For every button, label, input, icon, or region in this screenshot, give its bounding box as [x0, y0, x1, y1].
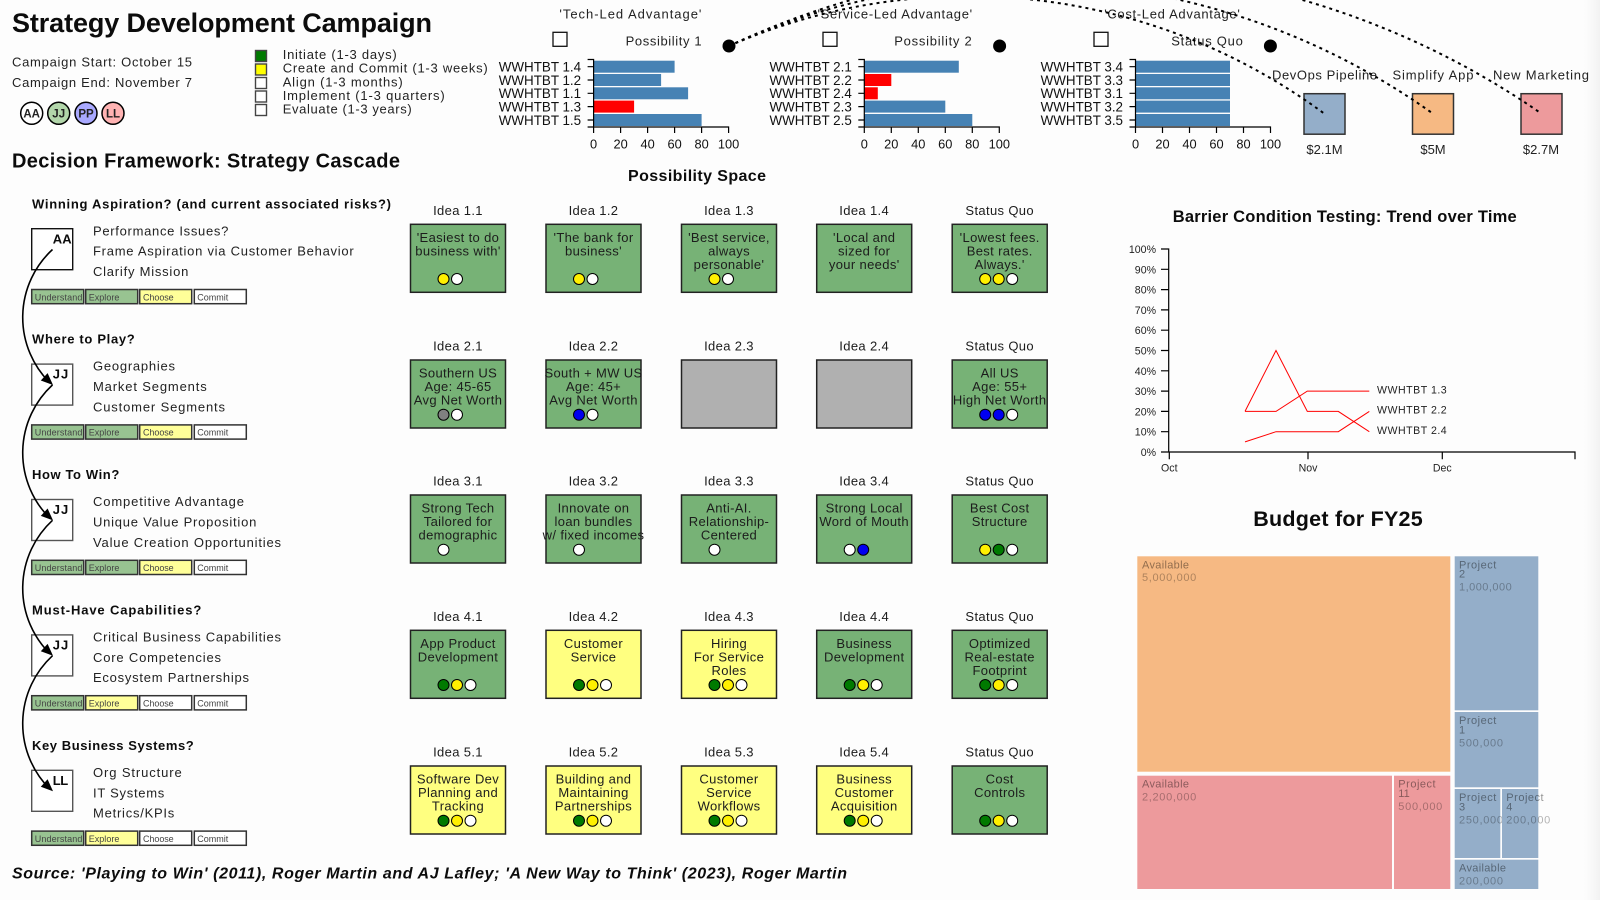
panel: must-have capabilities: Explore: [89, 698, 119, 708]
panel: winning aspiration: Performance Issues?: [93, 223, 228, 238]
treemap: budget for FY25: 1,000,000: [1459, 582, 1512, 594]
card: Idea 5.4: Acquisition: [831, 799, 898, 814]
treemap: budget for FY25: 2,200,000: [1142, 792, 1196, 804]
card: Idea 1.3: [682, 203, 776, 292]
card: Status Quo row 3: Status Quo: [965, 474, 1034, 489]
card: Idea 4.3: For Service: [694, 649, 764, 664]
card: Idea 3.4: Word of Mouth: [819, 514, 909, 529]
card: Idea 2.2: Idea 2.2: [569, 339, 618, 354]
bar chart: possibility 2: [769, 60, 1010, 152]
card: Idea 1.4: [817, 203, 912, 292]
panel: how to win: JJ: [53, 502, 68, 517]
bar chart: status quo: 100: [1260, 137, 1281, 152]
bar chart: possibility 2: WWHTBT 2.2: [769, 73, 852, 88]
card: Status Quo row 2: High Net Worth: [953, 393, 1046, 408]
team avatars: LL: [106, 108, 120, 120]
panel: must-have capabilities: JJ: [53, 638, 68, 653]
panel: winning aspiration: Choose: [143, 292, 174, 302]
card: Idea 3.1: Strong Tech: [422, 501, 494, 516]
line chart: barrier trend: 10%: [1135, 427, 1157, 439]
card: Idea 4.3: Roles: [712, 663, 747, 678]
bar chart: status quo: WWHTBT 3.1: [1041, 86, 1123, 101]
legend: phases: Initiate (1-3 days): [283, 47, 397, 62]
card: Idea 3.4: [817, 474, 912, 563]
status quo header: [1094, 6, 1277, 52]
card: Idea 5.2: Idea 5.2: [569, 745, 618, 760]
bar chart: possibility 2: WWHTBT 2.1: [769, 60, 852, 74]
card: Idea 2.4: Idea 2.4: [839, 339, 889, 354]
card: Status Quo row 2: Age: 55+: [972, 379, 1027, 394]
dashed links: possibility to projects: [729, 0, 1541, 113]
panel: where to play: Where to Play?: [32, 332, 135, 347]
bar chart: status quo: WWHTBT 3.2: [1041, 99, 1123, 114]
bar chart: status quo: WWHTBT 3.4: [1041, 60, 1124, 74]
legend: phases: Evaluate (1-3 years): [283, 102, 412, 116]
treemap: budget for FY25: 200,000: [1459, 875, 1503, 887]
legend: phases: Implement (1-3 quarters): [283, 88, 445, 103]
campaign dates: [12, 55, 192, 90]
card: Idea 4.2: [546, 609, 641, 698]
panel: where to play: Choose: [143, 428, 174, 438]
panel: how to win: Unique Value Proposition: [93, 514, 256, 530]
panel: key business systems: Explore: [89, 834, 119, 844]
bar chart: possibility 2: 100: [989, 137, 1010, 152]
card: Idea 5.3: Idea 5.3: [704, 745, 754, 760]
source note: Source: 'Playing to Win' (2011), Roger Martin and AJ Lafley; 'A New Way to Think' (2023), Roger Martin: [12, 865, 847, 882]
line chart: barrier trend: [1129, 244, 1575, 475]
line chart: barrier trend: 90%: [1135, 264, 1157, 276]
line chart: barrier trend: 80%: [1135, 285, 1157, 297]
bar chart: possibility 2: 20: [884, 137, 898, 152]
bar chart: possibility 2: WWHTBT 2.3: [769, 99, 852, 114]
panel: must-have capabilities: [32, 602, 282, 710]
card: Idea 2.2: Avg Net Worth: [549, 393, 638, 408]
project: New Marketing: [1493, 67, 1589, 157]
card: Status Quo row 2: Status Quo: [965, 339, 1034, 354]
card: Idea 1.1: Idea 1.1: [433, 203, 483, 218]
bar chart: possibility 2: WWHTBT 2.5: [769, 113, 852, 128]
card: Idea 3.2: Innovate on: [558, 501, 629, 516]
card: Idea 2.1: Southern US: [419, 366, 497, 381]
card: Idea 3.3: Idea 3.3: [704, 474, 754, 489]
card: Idea 4.4: [817, 609, 912, 698]
card: Idea 3.2: [542, 474, 644, 563]
card: Idea 4.1: Development: [418, 649, 498, 664]
panel: key business systems: Understand: [35, 834, 82, 844]
panel: key business systems: Metrics/KPIs: [93, 806, 175, 821]
card: Idea 5.1: Tracking: [432, 799, 484, 814]
card: Idea 1.3: always: [708, 244, 750, 259]
line chart: barrier trend: 30%: [1135, 386, 1157, 398]
card: Status Quo row 3: Structure: [972, 514, 1028, 529]
bar chart: possibility 1: 20: [613, 137, 628, 152]
card: Idea 5.2: Partnerships: [555, 799, 632, 814]
panel: winning aspiration: AA: [53, 231, 72, 246]
card: Idea 5.4: [817, 745, 912, 834]
possibility 2 header: [818, 6, 1006, 52]
card: Idea 4.4: Business: [836, 636, 892, 651]
bar chart: possibility 2: 40: [911, 137, 925, 152]
card: Status Quo row 5: [952, 745, 1047, 834]
treemap: budget for FY25: Project: [1459, 792, 1496, 804]
card: Idea 5.1: [410, 745, 506, 834]
card: Idea 1.2: [546, 203, 641, 292]
team avatars: [21, 102, 124, 124]
treemap: budget for FY25: 250,000: [1459, 815, 1503, 827]
card: Idea 3.2: loan bundles: [555, 514, 633, 529]
heading: barrier condition testing: Barrier Condition Testing: Trend over Time: [1173, 208, 1517, 226]
panel: key business systems: Commit: [197, 834, 229, 844]
card: Idea 2.1: Avg Net Worth: [414, 393, 502, 408]
line chart: barrier trend: 40%: [1135, 366, 1157, 378]
card: Idea 4.1: [410, 609, 506, 698]
status quo header: Status Quo: [1171, 34, 1243, 49]
card: Idea 3.1: demographic: [418, 528, 498, 543]
card: Idea 4.1: Idea 4.1: [433, 609, 483, 624]
line chart: barrier trend: 50%: [1135, 346, 1157, 358]
treemap: budget for FY25: Project: [1398, 779, 1436, 791]
card: Idea 5.3: Workflows: [698, 799, 761, 814]
line chart: barrier trend: Oct: [1161, 463, 1178, 475]
card: Idea 4.3: Idea 4.3: [704, 609, 754, 624]
card: Idea 1.1: 'Easiest to do: [417, 230, 499, 245]
card: Idea 2.1: Idea 2.1: [433, 339, 483, 354]
card: Idea 4.3: Hiring: [711, 636, 747, 651]
card: Idea 1.2: Idea 1.2: [569, 203, 618, 218]
bar chart: possibility 1: WWHTBT 1.2: [499, 73, 581, 88]
project: New Marketing: $2.7M: [1523, 142, 1559, 157]
bar chart: possibility 1: 0: [590, 137, 597, 152]
line chart: barrier trend: WWHTBT 2.2: [1377, 405, 1447, 417]
project: DevOps Pipeline: [1272, 67, 1377, 157]
panel: winning aspiration: Commit: [197, 292, 229, 302]
arrows: cascade links: [23, 250, 53, 791]
line chart: barrier trend: 100%: [1129, 244, 1157, 256]
card: Idea 4.4: Idea 4.4: [839, 609, 889, 624]
bar chart: possibility 1: WWHTBT 1.3: [499, 99, 581, 114]
card: Status Quo row 5: Cost: [986, 772, 1014, 787]
panel: key business systems: Org Structure: [93, 765, 182, 780]
bar chart: possibility 2: 80: [965, 137, 979, 152]
panel: how to win: How To Win?: [32, 467, 119, 482]
card: Idea 4.1: App Product: [420, 636, 496, 651]
panel: where to play: Explore: [89, 428, 119, 438]
panel: how to win: [32, 467, 282, 574]
title: Strategy Development Campaign: [12, 8, 432, 38]
card: Idea 1.4: 'Local and: [833, 230, 895, 245]
bar chart: possibility 1: [499, 60, 739, 152]
card: Idea 5.2: Building and: [556, 772, 631, 787]
bar chart: status quo: [1041, 60, 1281, 152]
treemap: budget for FY25: 1: [1459, 725, 1465, 737]
card: Idea 5.4: Business: [836, 772, 892, 787]
treemap: budget for FY25: [1137, 556, 1550, 889]
line chart: barrier trend: Nov: [1299, 463, 1318, 475]
legend: phases: Align (1-3 months): [283, 74, 403, 89]
treemap: budget for FY25: Project: [1459, 715, 1496, 727]
card: Idea 4.3: [682, 609, 776, 698]
card: Idea 5.2: [546, 745, 641, 834]
campaign dates: Campaign End: November 7: [12, 75, 192, 90]
bar chart: possibility 2: 60: [938, 137, 952, 152]
card: Status Quo row 4: Status Quo: [965, 609, 1034, 624]
panel: where to play: Geographies: [93, 359, 176, 374]
panel: must-have capabilities: Critical Business Capabilities: [93, 630, 282, 645]
project: Simplify App: [1392, 67, 1474, 157]
card: Status Quo row 2: All US: [981, 366, 1019, 381]
card: Status Quo row 5: Controls: [974, 785, 1025, 800]
card: Idea 3.3: [682, 474, 776, 563]
card: Idea 2.2: South + MW US: [544, 366, 643, 381]
card: Idea 3.2: Idea 3.2: [569, 474, 618, 489]
treemap: budget for FY25: 200,000: [1506, 815, 1550, 827]
card: Idea 1.4: sized for: [838, 244, 891, 259]
card: Idea 5.1: Idea 5.1: [433, 745, 483, 760]
card: Status Quo row 4: Footprint: [972, 663, 1027, 678]
line chart: barrier trend: Dec: [1433, 463, 1452, 475]
card: Idea 3.4: Strong Local: [826, 501, 903, 516]
status quo header: 'Cost-Led Advantage': [1104, 6, 1240, 21]
card: Idea 2.3: Idea 2.3: [704, 339, 754, 354]
card: Idea 2.1: Age: 45-65: [424, 379, 492, 394]
bar chart: possibility 1: 100: [718, 137, 739, 152]
legend: phases: Create and Commit (1-3 weeks): [283, 61, 488, 76]
possibility 1 header: 'Tech-Led Advantage': [559, 6, 701, 21]
panel: where to play: JJ: [53, 367, 68, 382]
card: Idea 3.2: w/ fixed incomes: [542, 528, 644, 543]
card: Idea 1.4: Idea 1.4: [839, 203, 889, 218]
card: Status Quo row 2: [952, 339, 1047, 428]
bar chart: status quo: 20: [1155, 137, 1170, 152]
legend: phases: [256, 47, 488, 116]
panel: must-have capabilities: Understand: [35, 698, 82, 708]
panel: must-have capabilities: Ecosystem Partnerships: [93, 670, 250, 685]
card: Status Quo row 3: [952, 474, 1047, 563]
treemap: budget for FY25: 500,000: [1398, 801, 1442, 813]
bar chart: status quo: WWHTBT 3.3: [1041, 73, 1123, 88]
panel: winning aspiration: Winning Aspiration? (and current associated risks?): [32, 196, 391, 211]
card: Idea 5.1: Software Dev: [417, 772, 499, 787]
treemap: budget for FY25: Available: [1142, 779, 1189, 791]
bar chart: possibility 1: WWHTBT 1.5: [499, 113, 581, 128]
card: Status Quo row 4: [952, 609, 1047, 698]
card: Idea 3.1: Tailored for: [424, 514, 493, 529]
card: Idea 3.3: Centered: [701, 528, 757, 543]
bar chart: possibility 1: 40: [640, 137, 655, 152]
panel: winning aspiration: Clarify Mission: [93, 264, 188, 279]
card: Status Quo row 4: Optimized: [969, 636, 1031, 651]
panel: where to play: [32, 332, 246, 439]
card: Idea 2.3: [682, 339, 776, 428]
treemap: budget for FY25: 500,000: [1459, 737, 1503, 749]
card: Idea 4.4: Development: [824, 649, 904, 664]
panel: key business systems: IT Systems: [93, 785, 165, 800]
card: Idea 2.2: Age: 45+: [566, 379, 621, 394]
line chart: barrier trend: 60%: [1135, 325, 1157, 337]
card: Idea 4.2: Customer: [564, 636, 623, 651]
campaign dates: Campaign Start: October 15: [12, 55, 192, 70]
panel: key business systems: [32, 738, 246, 845]
card: Status Quo row 1: Always.': [975, 257, 1025, 272]
card: Idea 5.4: Customer: [835, 785, 894, 800]
panel: where to play: Understand: [35, 428, 82, 438]
panel: key business systems: LL: [53, 773, 68, 788]
bar chart: status quo: 0: [1132, 137, 1139, 152]
card: Status Quo row 3: Best Cost: [970, 501, 1029, 516]
card: Idea 3.1: Idea 3.1: [433, 474, 483, 489]
card: Idea 5.4: Idea 5.4: [839, 745, 889, 760]
panel: how to win: Commit: [197, 563, 229, 573]
bar chart: status quo: 60: [1209, 137, 1224, 152]
card: Idea 5.2: Maintaining: [558, 785, 629, 800]
card: Idea 1.3: 'Best service,: [688, 230, 770, 245]
card: Status Quo row 1: Best rates.: [967, 244, 1033, 259]
bar chart: possibility 1: WWHTBT 1.1: [499, 86, 581, 101]
treemap: budget for FY25: Project: [1506, 792, 1544, 804]
card: Idea 2.2: [544, 339, 643, 428]
heading: budget: Budget for FY25: [1253, 507, 1423, 531]
team avatars: AA: [23, 108, 40, 120]
card: Idea 2.4: [817, 339, 912, 428]
card: Idea 5.1: Planning and: [418, 785, 498, 800]
bar chart: possibility 2: WWHTBT 2.4: [769, 86, 852, 101]
panel: must-have capabilities: Core Competencies: [93, 650, 222, 665]
card: Idea 1.3: Idea 1.3: [704, 203, 754, 218]
project: New Marketing: New Marketing: [1493, 67, 1589, 82]
panel: where to play: Commit: [197, 428, 229, 438]
line chart: barrier trend: 70%: [1135, 305, 1157, 317]
bar chart: possibility 1: WWHTBT 1.4: [499, 60, 582, 74]
team avatars: JJ: [52, 108, 65, 120]
line chart: barrier trend: 0%: [1141, 447, 1157, 459]
treemap: budget for FY25: 3: [1459, 802, 1465, 814]
panel: how to win: Value Creation Opportunities: [93, 535, 282, 550]
card: Status Quo row 4: Real-estate: [965, 649, 1035, 664]
card: Idea 5.3: Customer: [699, 772, 759, 787]
panel: must-have capabilities: Must-Have Capabilities?: [32, 603, 201, 618]
panel: winning aspiration: [32, 196, 391, 304]
possibility 2 header: 'Service-Led Advantage': [818, 6, 972, 21]
line chart: barrier trend: WWHTBT 1.3: [1377, 384, 1447, 396]
heading: decision framework: Decision Framework: Strategy Cascade: [12, 151, 400, 173]
treemap: budget for FY25: Available: [1459, 863, 1506, 875]
panel: how to win: Understand: [35, 563, 82, 573]
bar chart: possibility 1: 80: [694, 137, 709, 152]
card: Status Quo row 1: [952, 203, 1047, 292]
treemap: budget for FY25: Available: [1142, 559, 1189, 571]
treemap: budget for FY25: 4: [1506, 802, 1512, 814]
card: Idea 2.1: [410, 339, 506, 428]
bar chart: possibility 1: 60: [667, 137, 682, 152]
panel: key business systems: Key Business Systems?: [32, 738, 194, 753]
panel: winning aspiration: Understand: [35, 292, 82, 302]
card: Idea 3.3: Anti-AI.: [706, 501, 752, 516]
panel: winning aspiration: Explore: [89, 292, 119, 302]
project: Simplify App: $5M: [1420, 142, 1446, 157]
treemap: budget for FY25: Project: [1459, 559, 1496, 571]
card: Idea 5.3: [682, 745, 776, 834]
panel: how to win: Competitive Advantage: [93, 494, 244, 509]
card: Idea 4.2: Service: [571, 649, 616, 664]
panel: how to win: Explore: [89, 563, 119, 573]
card: Idea 1.1: business with': [415, 244, 501, 259]
panel: how to win: Choose: [143, 563, 174, 573]
bar chart: status quo: 80: [1236, 137, 1251, 152]
card: Idea 1.3: personable': [694, 257, 764, 272]
line chart: barrier trend: 20%: [1135, 406, 1157, 418]
card: Idea 3.4: Idea 3.4: [839, 474, 889, 489]
card: Status Quo row 1: Status Quo: [965, 203, 1034, 218]
treemap: budget for FY25: 11: [1398, 788, 1410, 800]
bar chart: status quo: WWHTBT 3.5: [1041, 113, 1123, 128]
treemap: budget for FY25: 5,000,000: [1142, 572, 1196, 584]
treemap: budget for FY25: 2: [1459, 569, 1465, 581]
project: DevOps Pipeline: DevOps Pipeline: [1272, 67, 1377, 82]
card: Idea 1.1: [410, 203, 506, 292]
possibility 1 header: Possibility 1: [626, 34, 702, 49]
card: Idea 1.2: business': [565, 244, 622, 259]
bar chart: status quo: 40: [1182, 137, 1197, 152]
panel: must-have capabilities: Choose: [143, 698, 174, 708]
card: Idea 4.2: Idea 4.2: [569, 609, 618, 624]
card: Idea 3.3: Relationship-: [689, 514, 769, 529]
team avatars: PP: [78, 108, 94, 120]
card: Idea 5.3: Service: [706, 785, 752, 800]
possibility 1 header: [553, 6, 736, 52]
heading: possibility space: Possibility Space: [628, 168, 766, 185]
bar chart: possibility 2: 0: [861, 137, 868, 152]
panel: must-have capabilities: Commit: [197, 698, 229, 708]
panel: winning aspiration: Frame Aspiration via Customer Behavior: [93, 244, 354, 259]
panel: where to play: Market Segments: [93, 379, 207, 394]
line chart: barrier trend: WWHTBT 2.4: [1377, 425, 1447, 437]
card: Status Quo row 1: 'Lowest fees.: [960, 230, 1040, 245]
panel: where to play: Customer Segments: [93, 399, 226, 414]
project: Simplify App: Simplify App: [1392, 67, 1474, 82]
card: Status Quo row 5: Status Quo: [965, 745, 1034, 760]
card: Idea 1.4: your needs': [829, 257, 900, 272]
card: Idea 1.2: 'The bank for: [553, 230, 634, 245]
possibility 2 header: Possibility 2: [894, 34, 972, 49]
panel: key business systems: Choose: [143, 834, 174, 844]
project: DevOps Pipeline: $2.1M: [1306, 142, 1343, 157]
card: Idea 3.1: [410, 474, 506, 563]
